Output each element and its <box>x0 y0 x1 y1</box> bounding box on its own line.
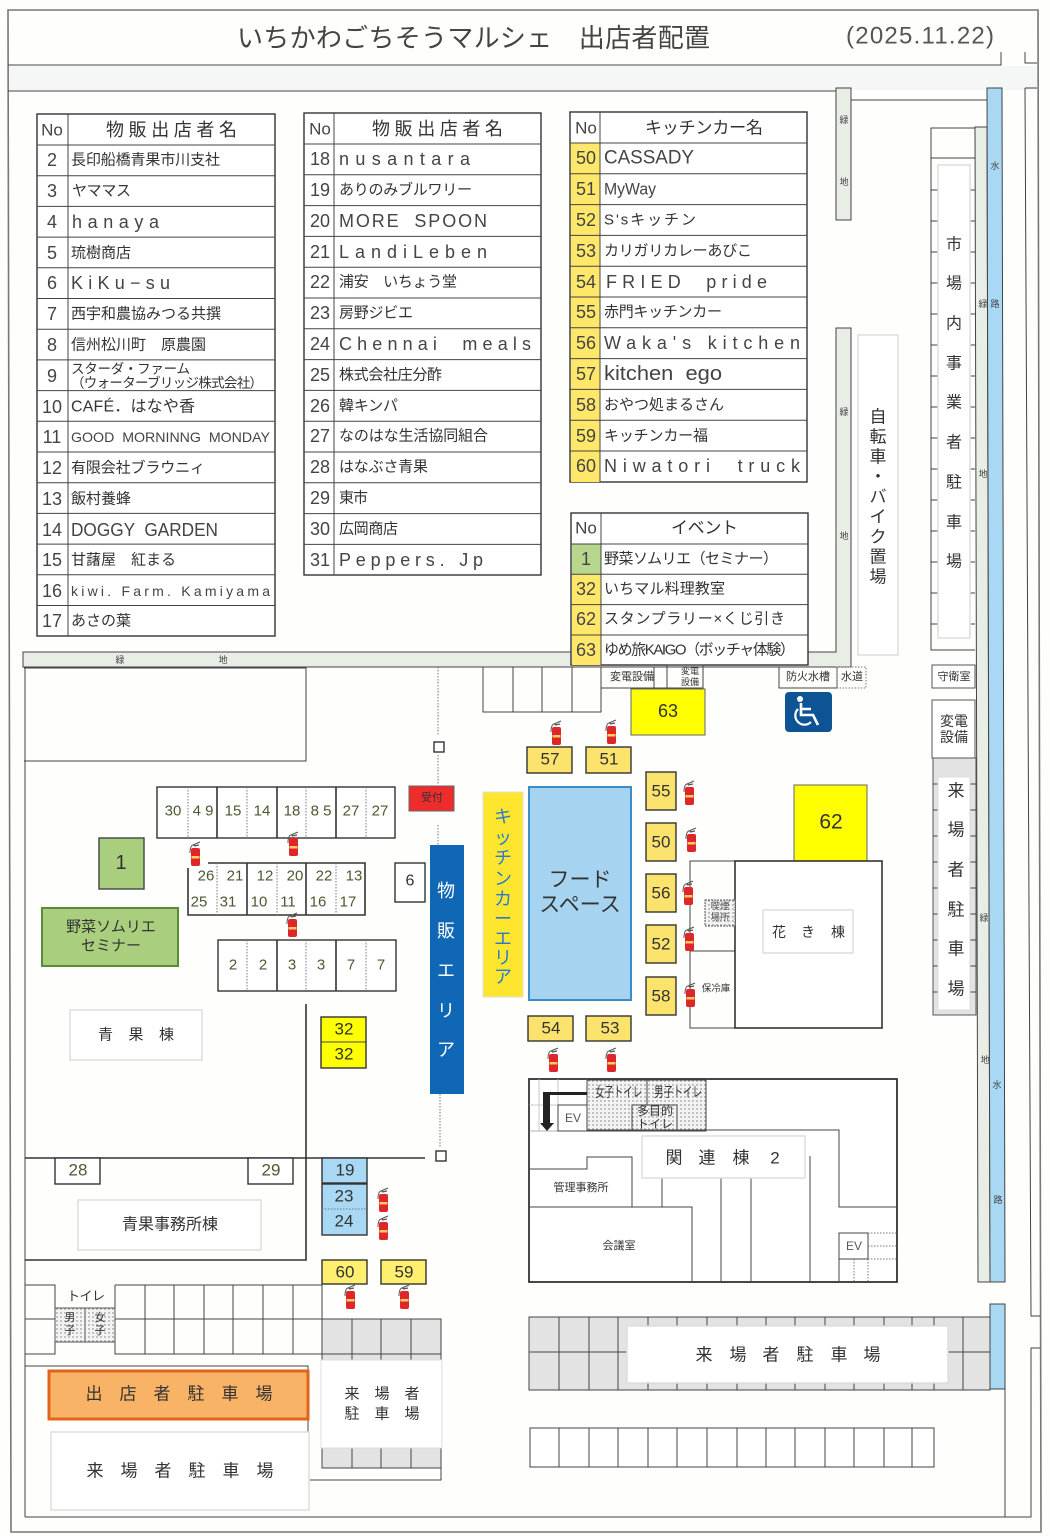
area: フードスペース: スペース <box>539 894 621 916</box>
reception: 受付 <box>409 786 454 811</box>
table: 物販出店者名 1: 飯村養蜂 <box>71 490 131 508</box>
building: 花き棟: 花き棟 <box>772 924 845 940</box>
parking: 出店者駐車場: 出店者駐車場 <box>86 1384 272 1404</box>
table: キッチンカー名 <box>570 112 807 482</box>
table: 物販出店者名 1: 3 <box>47 181 57 201</box>
parking grid: lower left <box>25 1285 441 1360</box>
building: 花き棟: 喫煙 <box>710 902 730 912</box>
table: 物販出店者名 1: 西宇和農協みつる共撰 <box>71 306 221 322</box>
date: (2025.11.22) <box>846 22 994 50</box>
stalls: row 1: 18 <box>284 802 300 820</box>
table: 物販出店者名 1: 12 <box>42 458 62 478</box>
toilet: トイレ: トイレ <box>67 1288 105 1304</box>
top-left enclosure <box>24 668 306 761</box>
table: 物販出店者名 1: 14 <box>42 520 62 540</box>
table: 物販出店者名 1: 6 <box>47 273 57 293</box>
stall 51: 51 <box>600 750 618 768</box>
table: キッチンカー名: 55 <box>576 302 596 322</box>
table: キッチンカー名: キッチンカー名 <box>645 118 763 138</box>
label: 自転車・バイク置場 <box>858 335 898 655</box>
table: 物販出店者名 2: 18 <box>310 149 330 169</box>
table: 物販出店者名 1: あさの葉 <box>71 612 131 630</box>
event 1: 1 <box>115 852 127 874</box>
waterway and green strip: 路 <box>993 1194 1003 1205</box>
parking: 市場内事業者駐車場 <box>931 128 975 650</box>
stall 54: 54 <box>542 1018 560 1038</box>
stall 53: 53 <box>601 1018 619 1038</box>
table: 物販出店者名 1: 7 <box>47 304 57 324</box>
event 32: 32 <box>335 1020 353 1038</box>
event 62 <box>794 785 867 861</box>
table: 物販出店者名 2: 23 <box>310 303 330 323</box>
table: 物販出店者名 1: 15 <box>42 550 62 570</box>
arrow <box>540 1092 587 1131</box>
table: 物販出店者名 1: 琉樹商店 <box>71 244 131 262</box>
table: 物販出店者名 1: 長印船橋青果市川支社 <box>71 152 220 168</box>
stalls: row 1: 27 <box>343 802 359 820</box>
table: キッチンカー名: 56 <box>576 333 596 353</box>
label: 関連棟 2: 関連棟2 <box>666 1148 780 1168</box>
toilet: トイレ <box>55 1288 115 1342</box>
table: 物販出店者名 2: 31 <box>310 550 330 570</box>
stalls: row 1 <box>157 787 395 838</box>
elevator: EV <box>565 1111 581 1125</box>
stalls: row 1: 27 <box>372 802 388 820</box>
stalls: row 1: 14 <box>254 802 270 820</box>
stalls: row 2: 22 <box>316 868 332 884</box>
green strip: 緑地 top: 地 <box>839 176 849 187</box>
table: 物販出店者名 1: 物販出店者名 <box>106 120 237 140</box>
table: 物販出店者名 1: GOOD MORNINNG MONDAY <box>71 429 271 445</box>
table: 物販出店者名 1: スターダ・ファーム <box>71 362 190 376</box>
table: キッチンカー名: 58 <box>576 395 596 415</box>
waterway and green strip: 緑 <box>979 912 989 923</box>
table: 物販出店者名 2: 房野ジビエ <box>339 304 413 322</box>
toilets <box>587 1080 706 1131</box>
toilets: 多目的 <box>637 1103 673 1118</box>
area: フードスペース <box>529 787 631 1000</box>
parking: 来場者駐車場 lower right: 来場者駐車場 <box>696 1346 880 1364</box>
table: 物販出店者名 1: hanaya <box>72 212 160 232</box>
table: キッチンカー名: Niwatori truck <box>604 456 801 476</box>
table: キッチンカー名: 52 <box>576 210 596 230</box>
facility: 変電設備 top: 設備 <box>681 676 699 687</box>
waterway and green strip: 水 <box>990 160 1000 171</box>
room: 守衛室: 守衛室 <box>938 670 970 683</box>
parking: 来場者駐車場 lower left <box>51 1432 309 1510</box>
table: 物販出店者名 2: 韓キンパ <box>339 398 398 414</box>
area: フードスペース: フード <box>548 868 612 892</box>
table: キッチンカー名: MyWay <box>604 180 656 198</box>
table: 物販出店者名 2 <box>304 113 541 575</box>
green strip: 緑地 horizontal: 地 <box>839 530 849 541</box>
table: 物販出店者名 2: 物販出店者名 <box>372 119 503 139</box>
table: キッチンカー名: 57 <box>576 364 596 384</box>
stall 51 <box>586 747 631 773</box>
stall 6 <box>395 863 425 902</box>
table: イベント: スタンプラリー×くじ引き <box>604 610 785 628</box>
table: キッチンカー名: Waka's kitchen <box>604 333 800 353</box>
table: イベント: イベント <box>671 518 738 538</box>
stalls: row 2: 16 <box>310 894 326 910</box>
table: 物販出店者名 2: 26 <box>310 396 330 416</box>
stalls: row 2: 12 <box>257 868 273 884</box>
table: 物販出店者名 1: （ウォーターブリッジ株式会社） <box>71 374 263 390</box>
table: 物販出店者名 1: 有限会社ブラウニィ <box>71 458 205 476</box>
table: 物販出店者名 2: 東市 <box>339 490 368 506</box>
building: 関連棟2: 会議室 <box>602 1238 636 1252</box>
elevator right <box>839 1233 868 1259</box>
parking: 来場者駐車場 lower left: 来場者駐車場 <box>86 1462 274 1480</box>
stalls: row 3: 3 <box>317 956 325 974</box>
table: イベント: 野菜ソムリエ（セミナー） <box>604 550 778 568</box>
waterway and green strip <box>975 88 1005 1389</box>
event 32: 32 <box>335 1044 353 1064</box>
table: 物販出店者名 2: 広岡商店 <box>339 520 398 538</box>
table: イベント: 62 <box>576 609 596 629</box>
stall 59 <box>381 1260 426 1284</box>
stalls: row 2 <box>188 863 365 915</box>
table: 物販出店者名 1: kiwi. Farm. Kamiyama <box>71 583 270 599</box>
toilets: トイレ <box>637 1117 673 1131</box>
stalls: row 3: 7 <box>347 956 355 974</box>
table: 物販出店者名 1: 10 <box>42 397 62 417</box>
table: 物販出店者名 1: 4 <box>47 212 57 232</box>
parking: 来場者駐車場 centre: 駐車場 <box>344 1406 420 1422</box>
table: 物販出店者名 2: Chennai meals <box>339 334 531 354</box>
table: キッチンカー名: キッチンカー福 <box>604 428 708 444</box>
facility: 変電設備 top: 変電 <box>681 665 699 676</box>
event 32 <box>321 1017 366 1068</box>
building: 関連棟2 <box>529 1079 897 1282</box>
table: 物販出店者名 2: 19 <box>310 180 330 200</box>
table: イベント: No <box>575 518 597 538</box>
parking: 市場内事業者駐車場: 市場内事業者駐車場 <box>946 236 962 570</box>
table: イベント <box>571 513 808 665</box>
green strip: 緑地 top: 緑 <box>839 114 849 125</box>
table: イベント: ゆめ旅KAIGO（ボッチャ体験） <box>604 642 795 658</box>
stalls 19 23 24: 19 <box>336 1160 354 1180</box>
stall 58: 58 <box>652 986 670 1006</box>
stall 55: 55 <box>652 782 670 800</box>
stalls: row 1: 4 9 <box>193 802 213 820</box>
building walls: 青果事務所 <box>25 1004 425 1260</box>
table: 物販出店者名 1 <box>37 114 275 636</box>
table: 物販出店者名 2: 30 <box>310 519 330 539</box>
stalls 19 23 24: 24 <box>335 1212 353 1230</box>
marker squares <box>434 742 446 1161</box>
table: イベント: 63 <box>576 640 596 660</box>
seminar: 野菜ソムリエセミナー <box>42 908 178 966</box>
facility: 防火水槽 水道: 水道 <box>841 669 863 683</box>
label: 青果事務所棟 <box>78 1200 261 1250</box>
stalls: row 3: 3 <box>288 956 296 974</box>
building: 花き棟 <box>690 861 882 1028</box>
icons: fire extinguishers <box>190 720 696 1309</box>
stall 54 <box>528 1016 573 1041</box>
table: キッチンカー名: 51 <box>576 179 596 199</box>
stalls: row 3 <box>218 940 396 991</box>
table: キッチンカー名: 60 <box>576 456 596 476</box>
table: 物販出店者名 2: なのはな生活協同組合 <box>339 428 488 444</box>
stalls: row 3: 2 <box>229 956 237 974</box>
table: 物販出店者名 1: 信州松川町 原農園 <box>71 336 206 354</box>
stall 29 <box>248 1158 293 1184</box>
table: 物販出店者名 1: 2 <box>47 150 57 170</box>
table: 物販出店者名 1: 甘藷屋 紅まる <box>71 552 176 568</box>
event 62: 62 <box>819 810 843 834</box>
table: 物販出店者名 1: 17 <box>42 611 62 631</box>
table: キッチンカー名: おやつ処まるさん <box>604 396 724 414</box>
event 63: 63 <box>658 701 678 721</box>
table: 物販出店者名 1: ヤママス <box>72 182 131 200</box>
parking: 来場者駐車場 centre: 来場者 <box>344 1386 420 1402</box>
parking stalls: bottom row <box>530 1428 934 1467</box>
stall 56: 56 <box>652 884 670 902</box>
stall 52 <box>646 925 676 963</box>
building: 関連棟2: 管理事務所 <box>554 1180 608 1194</box>
table: 物販出店者名 1: 16 <box>42 581 62 601</box>
stalls 19 23 24: 23 <box>335 1186 353 1206</box>
table: 物販出店者名 2: はなぶさ青果 <box>339 458 428 476</box>
table: キッチンカー名: 59 <box>576 426 596 446</box>
stall 56 <box>646 874 676 912</box>
table: 物販出店者名 2: 22 <box>310 272 330 292</box>
seminar: 野菜ソムリエセミナー: セミナー <box>81 938 141 954</box>
label: 自転車・バイク置場: 自転車・バイク置場 <box>870 408 886 586</box>
waterway and green strip: 地 <box>978 468 988 479</box>
table: 物販出店者名 2: LandiLeben <box>339 242 487 262</box>
area: 物販エリア <box>430 845 464 1094</box>
area: 物販エリア: 物販エリア <box>437 881 455 1060</box>
event 1 <box>99 838 144 889</box>
green strip: 緑地 horizontal: 緑 <box>115 654 125 665</box>
stall 55 <box>646 772 676 810</box>
facility: 防火水槽 水道: 防火水槽 <box>786 669 830 683</box>
table: 物販出店者名 2: ありのみブルワリー <box>339 180 472 198</box>
area: キッチンカーエリア: キッチンカーエリア <box>494 807 512 987</box>
stall 52: 52 <box>652 934 670 954</box>
stalls: row 3: 7 <box>377 956 385 974</box>
table: 物販出店者名 2: 25 <box>310 365 330 385</box>
waterway and green strip: 水 <box>992 1079 1002 1090</box>
parking: 来場者駐車場 centre <box>310 1360 442 1480</box>
green strip: 緑地 top <box>836 88 851 220</box>
stall 6: 6 <box>406 872 415 890</box>
stall 57: 57 <box>541 750 559 768</box>
table: キッチンカー名: FRIED pride <box>606 272 767 292</box>
parking: 来場者駐車場 lower right <box>529 1317 990 1390</box>
table: 物販出店者名 1: CAFÉ．はなや香 <box>71 396 195 416</box>
stalls: row 2: 21 <box>227 868 243 884</box>
room: 変電設備 <box>932 700 975 758</box>
parking: 出店者駐車場 <box>49 1371 308 1419</box>
stall 53 <box>586 1016 631 1041</box>
lot frame <box>25 1366 308 1432</box>
table: 物販出店者名 1: DOGGY GARDEN <box>71 520 218 540</box>
table: イベント: いちマル料理教室 <box>604 580 725 598</box>
area: キッチンカーエリア <box>483 792 523 997</box>
waterway and green strip: 地 <box>980 1054 990 1065</box>
table: キッチンカー名: 50 <box>576 148 596 168</box>
table: キッチンカー名: 53 <box>576 241 596 261</box>
stall 29: 29 <box>262 1160 280 1180</box>
stalls: row 1: 8 5 <box>311 802 331 820</box>
parking: 来場者駐車場 right: 来場者駐車場 <box>948 782 964 998</box>
stalls 19 23 24 <box>322 1158 367 1235</box>
green strip: 緑地 horizontal: 地 <box>218 654 228 665</box>
table: 物販出店者名 2: 浦安 いちょう堂 <box>339 274 457 290</box>
building: 花き棟: 保冷庫 <box>702 982 731 994</box>
stall 58 <box>646 977 676 1015</box>
green strip: 緑地 horizontal: 緑 <box>839 406 849 417</box>
reception: 受付: 受付 <box>421 791 443 804</box>
table: キッチンカー名: 54 <box>576 272 596 292</box>
entrance dotted line <box>438 667 440 1147</box>
table: 物販出店者名 2: 株式会社庄分酢 <box>339 366 442 384</box>
stall 50: 50 <box>652 832 670 852</box>
table: 物販出店者名 2: No <box>309 120 331 138</box>
elevator <box>558 1105 587 1131</box>
building: 花き棟: 場所 <box>710 912 730 924</box>
stall 50 <box>646 823 676 861</box>
stalls: row 2: 10 <box>251 894 267 910</box>
table: 物販出店者名 2: Peppers. Jp <box>339 550 483 570</box>
seminar: 野菜ソムリエセミナー: 野菜ソムリエ <box>66 918 156 936</box>
stall 60 <box>322 1260 367 1284</box>
table: キッチンカー名: 赤門キッチンカー <box>604 304 722 320</box>
facility: 防火水槽 水道 <box>779 667 866 688</box>
stalls: row 1: 30 <box>165 802 181 820</box>
table: 物販出店者名 2: 24 <box>310 334 330 354</box>
stall 28: 28 <box>69 1160 87 1180</box>
room: 変電設備: 変電 <box>940 713 968 729</box>
table: イベント: 32 <box>576 579 596 599</box>
toilets: 女子トイレ <box>595 1084 642 1100</box>
stalls: row 2: 17 <box>340 894 356 910</box>
stall 60: 60 <box>336 1262 354 1282</box>
stalls: row 2: 11 <box>280 894 296 910</box>
table: 物販出店者名 2: nusantara <box>339 149 471 169</box>
table: 物販出店者名 2: 20 <box>310 211 330 231</box>
icon: wheelchair <box>785 692 832 732</box>
title: いちかわごちそうマルシェ 出店者配置 <box>237 23 710 53</box>
waterway and green strip: 緑 <box>978 298 988 309</box>
event 63 <box>631 689 705 735</box>
table: キッチンカー名: CASSADY <box>604 148 694 168</box>
green strip: 緑地 horizontal <box>23 328 851 667</box>
stalls: row 2: 20 <box>287 868 303 884</box>
table: イベント: 1 <box>581 549 591 569</box>
table: 物販出店者名 1: 8 <box>47 335 57 355</box>
facility: 変電設備 top <box>601 665 703 688</box>
table: キッチンカー名: kitchen ego <box>604 363 722 385</box>
table: 物販出店者名 1: 11 <box>43 427 61 447</box>
elevator right: EV <box>846 1239 862 1253</box>
table: 物販出店者名 2: 29 <box>310 488 330 508</box>
toilet: トイレ: 男子 <box>64 1312 76 1337</box>
stalls: row 2: 31 <box>220 894 236 910</box>
table: キッチンカー名: S'sキッチン <box>604 212 696 228</box>
table: 物販出店者名 1: KiKu−su <box>71 273 170 293</box>
table: キッチンカー名: No <box>575 118 597 138</box>
label: 青果棟 <box>70 1010 202 1060</box>
room: 変電設備: 設備 <box>940 729 968 745</box>
toilet: トイレ: 女子 <box>94 1311 106 1337</box>
room: 守衛室 <box>932 665 975 688</box>
table: キッチンカー名: カリガリカレーあびこ <box>604 242 752 260</box>
table: 物販出店者名 1: 13 <box>42 489 62 509</box>
parking: 来場者駐車場 right <box>933 758 976 1015</box>
road band <box>9 66 1037 90</box>
table: 物販出店者名 1: 5 <box>47 243 57 263</box>
facility: 変電設備 top: 変電設備 <box>610 670 654 683</box>
label: 関連棟 2 <box>642 1136 805 1178</box>
stalls: row 1: 15 <box>225 802 241 820</box>
table: 物販出店者名 1: No <box>41 120 63 140</box>
stalls: row 2: 25 <box>191 894 207 910</box>
stall 59: 59 <box>395 1262 413 1282</box>
table: 物販出店者名 1: 9 <box>47 366 57 386</box>
parking stalls: top centre <box>483 667 601 712</box>
label: 青果棟: 青果棟 <box>98 1026 174 1044</box>
label: 青果事務所棟: 青果事務所棟 <box>122 1216 218 1234</box>
toilets: 男子トイレ <box>654 1084 702 1100</box>
stalls: row 3: 2 <box>259 956 267 974</box>
waterway and green strip: 路 <box>990 298 1000 309</box>
stalls: row 2: 13 <box>346 868 362 884</box>
stall 28 <box>55 1158 100 1184</box>
table: 物販出店者名 2: 27 <box>310 426 330 446</box>
table: 物販出店者名 2: 28 <box>310 457 330 477</box>
table: 物販出店者名 2: 21 <box>310 242 330 262</box>
stalls: row 2: 26 <box>198 868 214 884</box>
table: 物販出店者名 2: MORE SPOON <box>339 211 487 231</box>
stall 57 <box>527 747 572 773</box>
